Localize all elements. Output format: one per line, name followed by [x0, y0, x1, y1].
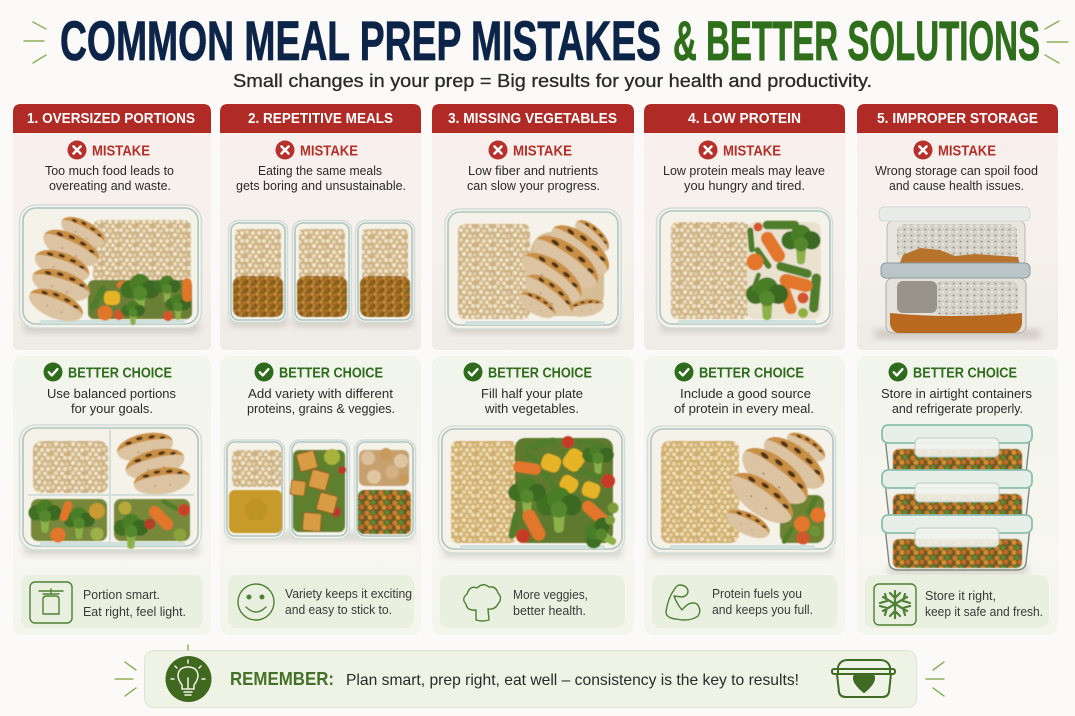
mistake section: and cause health issues. [889, 179, 1024, 193]
icon: snowflake [874, 584, 916, 625]
better choice section [432, 356, 634, 635]
panel: 5 improper storage [857, 104, 1058, 635]
tip box: Variety keeps it exciting [285, 587, 412, 601]
tip box [228, 575, 414, 628]
tip box: and easy to stick to. [285, 603, 392, 617]
tip box: Portion smart. [83, 588, 160, 602]
mistake section: MISTAKE [300, 144, 358, 160]
header [220, 104, 421, 133]
remember label: REMEMBER: [230, 669, 334, 689]
food: rice and chicken protein container [648, 426, 836, 556]
food: airtight stacked containers [882, 425, 1032, 574]
title: COMMON MEAL PREP MISTAKES [60, 9, 661, 72]
food: divided container [20, 425, 202, 554]
food: spoiled stacked containers [875, 207, 1040, 338]
header: 2. REPETITIVE MEALS [248, 111, 393, 127]
better choice section [644, 356, 845, 635]
better choice section: BETTER CHOICE [488, 366, 592, 382]
better choice section: Include a good source [680, 387, 811, 401]
panel: 1 oversized portions [13, 104, 211, 635]
mistake section: MISTAKE [92, 144, 150, 160]
header: 5. IMPROPER STORAGE [877, 111, 1038, 127]
mistake section: MISTAKE [513, 144, 572, 160]
remember message: Plan smart, prep right, eat well – consistency is the key to results! [346, 672, 799, 689]
header: 4. LOW PROTEIN [688, 111, 801, 127]
tip box: Store it right, [925, 589, 996, 603]
mistake section [432, 133, 634, 350]
better choice section [13, 356, 211, 635]
better choice section [220, 356, 421, 635]
tip box: better health. [513, 604, 586, 618]
mistake section: can slow your progress. [467, 179, 600, 193]
tip box [865, 575, 1049, 628]
better choice section [857, 356, 1058, 635]
icon: flexed arm [666, 585, 700, 620]
mistake section: Eating the same meals [258, 164, 382, 178]
tip box: More veggies, [513, 588, 588, 602]
mistake section: MISTAKE [938, 144, 996, 160]
mistake section [220, 133, 421, 350]
mistake section: gets boring and unsustainable. [236, 179, 406, 193]
better choice section: BETTER CHOICE [68, 366, 172, 382]
food: oversized container [20, 205, 202, 332]
food: varied containers [224, 440, 416, 541]
mistake section: Low fiber and nutrients [468, 164, 598, 178]
food: three identical containers [228, 220, 414, 326]
header [432, 104, 634, 133]
better choice section: BETTER CHOICE [913, 366, 1017, 382]
better choice section: Store in airtight containers [881, 387, 1032, 401]
header [644, 104, 845, 133]
better choice section: BETTER CHOICE [279, 366, 383, 382]
tip box: Eat right, feel light. [83, 605, 186, 619]
food: rice and vegetables container [656, 208, 832, 331]
header: 3. MISSING VEGETABLES [448, 111, 617, 127]
icon: container with heart [832, 660, 895, 697]
header [13, 104, 211, 133]
mistake section: overeating and waste. [49, 179, 171, 193]
food: half vegetables container [438, 426, 624, 557]
panel: 4 low protein [644, 104, 845, 635]
mistake section: Too much food leads to [45, 164, 174, 178]
mistake section: MISTAKE [723, 144, 781, 160]
icon: smiley [238, 584, 274, 620]
icon: broccoli [464, 585, 500, 621]
better choice section: BETTER CHOICE [699, 366, 804, 382]
mistake section [857, 133, 1058, 350]
mistake section [644, 133, 845, 350]
better choice section: with vegetables. [484, 402, 579, 416]
panel: 2 repetitive meals [220, 104, 421, 635]
tip box: keep it safe and fresh. [925, 605, 1043, 619]
subtitle: Small changes in your prep = Big results for your health and productivity. [233, 71, 872, 91]
tip box [440, 575, 625, 628]
better choice section: of protein in every meal. [674, 402, 814, 416]
better choice section: and refrigerate properly. [892, 402, 1023, 416]
tip box [652, 575, 837, 628]
header: 1. OVERSIZED PORTIONS [27, 111, 195, 127]
tip box: Protein fuels you [712, 587, 802, 601]
tip box: and keeps you full. [712, 603, 813, 617]
icon: lightbulb [166, 656, 212, 702]
mistake section: Low protein meals may leave [663, 164, 825, 178]
better choice section: for your goals. [71, 402, 153, 416]
mistake section: Wrong storage can spoil food [875, 164, 1038, 178]
icon: scale [30, 582, 72, 623]
better choice section: Add variety with different [248, 387, 394, 401]
panel: 3 missing vegetables [432, 104, 634, 635]
header [857, 104, 1058, 133]
mistake section [13, 133, 211, 350]
mistake section: you hungry and tired. [684, 179, 805, 193]
reminder banner [115, 645, 944, 708]
better choice section: Fill half your plate [481, 387, 583, 401]
better choice section: Use balanced portions [47, 387, 176, 401]
tip box [21, 575, 203, 628]
food: rice and chicken container [445, 209, 621, 332]
better choice section: proteins, grains & veggies. [247, 402, 395, 416]
